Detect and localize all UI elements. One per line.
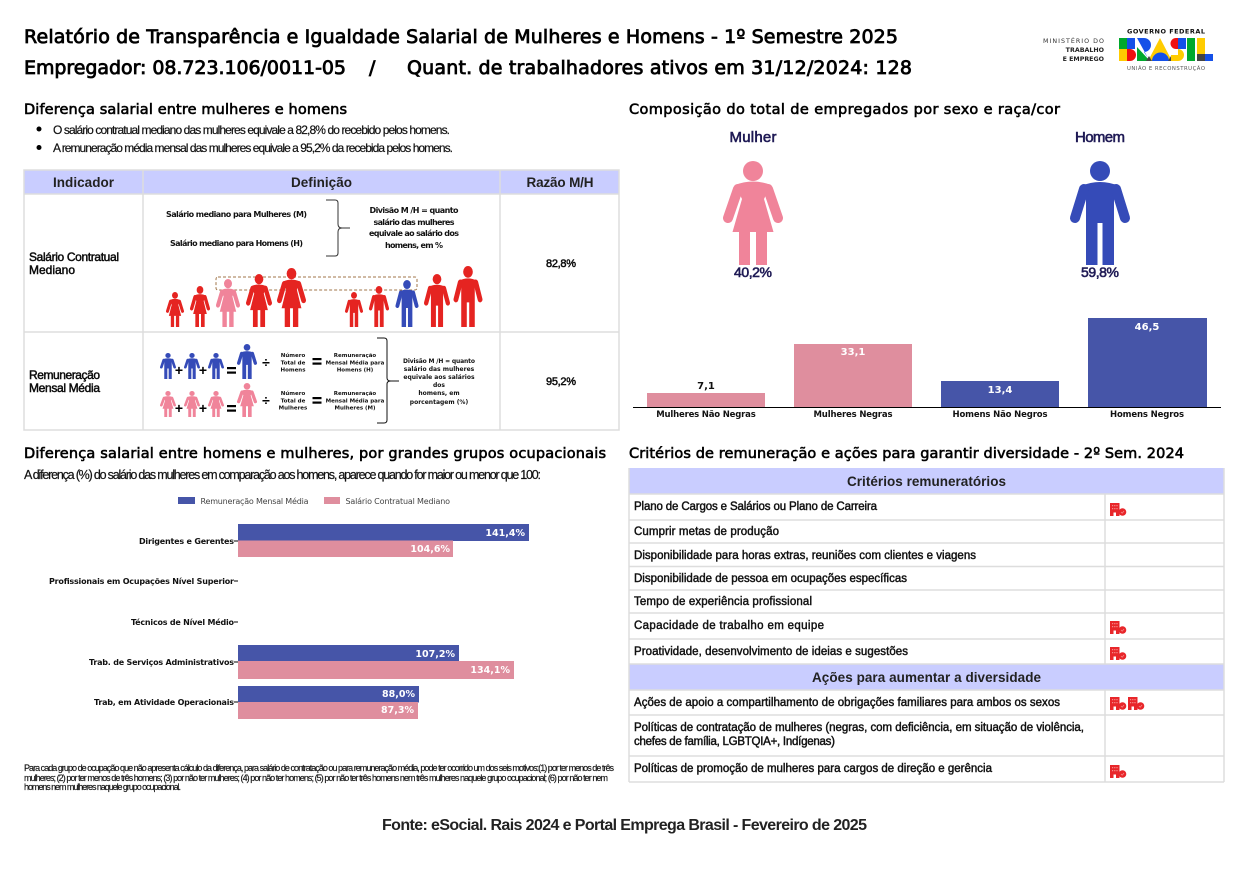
row: remuneração mensal média: Mensal Média (29, 381, 100, 395)
bar: mulheres não negras: 7,1 (697, 381, 715, 392)
subtitle: A diferença (%) do salário das mulheres em comparação aos homens, aparece quando for maior ou menor que 100: (24, 468, 541, 482)
icon: men equation: Homens (280, 368, 306, 374)
logo: ministério: E EMPREGO (1063, 56, 1105, 63)
title (24, 26, 912, 79)
group: serviços administrativos: Trab. de Serviços Administrativos (89, 658, 234, 667)
pictogram: homem: 59,8% (1081, 264, 1119, 280)
criteria list: Capacidade de trabalho em equipe (634, 620, 824, 632)
actions list: Ações de apoio a compartilhamento de obrigações familiares para ambos os sexos (634, 697, 1060, 709)
icon: women equation: Mulheres (279, 406, 308, 412)
row: salário contratual mediano: Salário mediano para Mulheres (M) (166, 210, 307, 219)
icon: men equation: + (175, 362, 183, 378)
row: remuneração mensal média (29, 338, 576, 423)
icon: women equation: Total de (281, 398, 306, 404)
logo: ministério (1043, 36, 1105, 63)
group: atividade operacionais: 87,3% (381, 705, 414, 716)
logo: governo federal brasil: GOVERNO FEDERAL (1127, 28, 1205, 36)
icon: men equation: Número (281, 352, 305, 359)
group: dirigentes e gerentes: 141,4% (485, 528, 525, 539)
bar: mulheres negras: 33,1 (841, 347, 865, 358)
row: remuneração mensal média: homens, em (418, 390, 460, 397)
table header: Definição (291, 175, 352, 190)
row: salário contratual mediano: 82,8% (546, 258, 576, 270)
icons: critérios (1110, 503, 1126, 660)
footnote: mulheres; (2) por ter menos de três homens; (3) por não ter mulheres; (4) por não ter homens; (5) por não ter três homens nem três mulheres naquele grupo ocupacional; (6) por não ter nem (24, 773, 608, 783)
icon: women row (168, 268, 304, 327)
source: Fonte: eSocial. Rais 2024 e Portal Emprega Brasil - Fevereiro de 2025 (382, 817, 867, 834)
actions list: Políticas de contratação de mulheres (negras, com deficiência, em situação de violência, (634, 722, 1084, 734)
footnote: homens nem mulheres naquele grupo ocupacional. (24, 782, 181, 792)
icon: men equation: + (199, 362, 207, 378)
bar: homens não negros: 13,4 (988, 385, 1012, 396)
row: remuneração mensal média: Remuneração (29, 368, 100, 382)
legend: Salário Contratual Mediano (346, 497, 450, 506)
icon: women equation: Número (281, 390, 305, 397)
row: remuneração mensal média: Divisão M /H = quanto (403, 358, 475, 365)
icon: men equation (161, 344, 385, 379)
heading: composição: Composição do total de empregados por sexo e raça/cor (629, 102, 1060, 118)
row: remuneração mensal média: equivale aos salários (403, 374, 475, 381)
pictogram: mulher: 40,2% (734, 264, 772, 280)
table: critérios e ações (629, 468, 1224, 782)
row: remuneração mensal média: 95,2% (546, 376, 576, 388)
group: dirigentes e gerentes: 104,6% (410, 544, 450, 555)
group: serviços administrativos (89, 645, 514, 679)
title: / (369, 57, 376, 79)
group: dirigentes e gerentes (139, 524, 529, 557)
actions list: chefes de família, LGBTQIA+, Indígenas) (634, 736, 835, 748)
criteria list: Tempo de experiência profissional (634, 596, 812, 608)
icon: men equation: ÷ (262, 354, 270, 370)
logo: governo federal brasil: UNIÃO E RECONSTRUÇÃO (1127, 65, 1205, 72)
icon: men equation: Total de (281, 360, 306, 366)
row: remuneração mensal média: dos (433, 382, 445, 389)
bar: homens negros (1088, 318, 1207, 420)
logo: ministério: TRABALHO (1066, 47, 1105, 54)
pictogram: mulher: Mulher (730, 129, 776, 146)
group: atividade operacionais (94, 686, 419, 719)
row: salário contratual mediano: Salário Contratual (29, 250, 119, 264)
row: salário contratual mediano: Mediano (29, 263, 75, 277)
logo: governo federal brasil (1119, 28, 1213, 72)
pictogram: homem (1075, 129, 1125, 280)
header: critérios remuneratórios: Critérios remuneratórios (847, 474, 1006, 489)
icon: women equation: ÷ (262, 392, 270, 408)
bar: homens não negros: Homens Não Negros (952, 410, 1048, 420)
criteria list: Disponibilidade para horas extras, reuniões com clientes e viagens (634, 550, 976, 562)
title: Relatório de Transparência e Igualdade Salarial de Mulheres e Homens - 1º Semestre 2025 (24, 26, 898, 48)
table header: Indicador (53, 175, 115, 190)
bar: mulheres não negras: Mulheres Não Negras (656, 410, 756, 420)
criteria list: Proatividade, desenvolvimento de ideias e sugestões (634, 646, 908, 658)
icon: women equation: Mensal Média para (326, 398, 385, 404)
bar: homens negros: 46,5 (1135, 322, 1159, 333)
icon: women equation (161, 383, 385, 417)
legend (178, 496, 450, 506)
row: salário contratual mediano: homens, em % (385, 241, 443, 250)
actions list: Políticas de promoção de mulheres para cargos de direção e gerência (634, 763, 993, 775)
heading: grupos ocupacionais: Diferença salarial entre homens e mulheres, por grandes grupos ocupacionais (24, 446, 606, 462)
heading: diferença salarial: Diferença salarial entre mulheres e homens (24, 102, 347, 118)
icon: women equation: + (199, 400, 207, 416)
title: Empregador: 08.723.106/0011-05 (24, 57, 346, 79)
row: salário contratual mediano (29, 200, 576, 327)
group: dirigentes e gerentes: Dirigentes e Gerentes (139, 537, 234, 546)
bullet list: O salário contratual mediano das mulheres equivale a 82,8% do recebido pelos homens. (53, 123, 450, 137)
pictogram: mulher (728, 129, 778, 280)
logo: ministério: MINISTÉRIO DO (1043, 36, 1104, 45)
group: profissionais nível superior: Profissionais em Ocupações Nível Superior (49, 577, 234, 586)
pictogram: homem: Homem (1075, 129, 1125, 146)
footnote: Para cada grupo de ocupação que não apresenta cálculo da diferença, para salário de contratação ou para remuneração média, pode ter ocorrido um dos seis motivos:(1) por ter menos de três (24, 763, 614, 773)
icon: women equation: Remuneração (334, 391, 376, 397)
footnote (24, 763, 614, 792)
group: atividade operacionais: Trab, em Atividade Operacionais (94, 698, 234, 707)
criteria list (634, 501, 976, 658)
row: remuneração mensal média: salário das mulheres (404, 366, 475, 373)
icon: men row (346, 266, 480, 327)
icon: women equation: + (175, 400, 183, 416)
bullet list: A remuneração média mensal das mulheres equivale a 95,2% da recebida pelos homens. (53, 141, 453, 155)
table: indicadores (24, 170, 619, 430)
criteria list: Disponibilidade de pessoa em ocupações específicas (634, 573, 907, 585)
row: remuneração mensal média: porcentagem (%) (410, 399, 468, 406)
table header (53, 175, 594, 190)
header: ações: Ações para aumentar a diversidade (812, 670, 1041, 685)
heading: critérios: Critérios de remuneração e ações para garantir diversidade - 2º Sem. 2024 (629, 446, 1184, 462)
table header: Razão M/H (526, 175, 594, 190)
bullet list (36, 123, 453, 155)
icons: ações (1110, 697, 1144, 778)
legend: Remuneração Mensal Média (200, 496, 309, 506)
title: Quant. de trabalhadores ativos em 31/12/2024: 128 (407, 57, 912, 79)
bar: mulheres negras: Mulheres Negras (814, 410, 892, 420)
criteria list: Cumprir metas de produção (634, 526, 779, 538)
group: técnicos nível médio: Técnicos de Nível Médio (131, 617, 234, 627)
icon: men equation: Remuneração (334, 353, 376, 359)
group: atividade operacionais: 88,0% (382, 689, 415, 700)
group: serviços administrativos: 107,2% (415, 649, 455, 660)
row: salário contratual mediano: equivale ao salário dos (369, 229, 459, 238)
row: salário contratual mediano: Divisão M /H = quanto (370, 206, 459, 215)
criteria list: Plano de Cargos e Salários ou Plano de Carreira (634, 501, 878, 513)
icon: men equation: Homens (H) (337, 368, 374, 374)
bar: homens negros: Homens Negros (1110, 410, 1184, 420)
bar chart: composição por sexo e raça (633, 318, 1221, 420)
icon: men equation: Mensal Média para (326, 360, 385, 366)
bar: mulheres não negras (647, 381, 765, 420)
icon: women equation: Mulheres (M) (334, 406, 376, 412)
row: salário contratual mediano: Salário mediano para Homens (H) (170, 239, 303, 248)
actions list (634, 697, 1084, 775)
row: salário contratual mediano: salário das mulheres (374, 218, 455, 227)
group: serviços administrativos: 134,1% (470, 665, 510, 676)
bar: homens não negros (941, 381, 1059, 420)
bar: mulheres negras (794, 344, 912, 420)
bar chart: grupos ocupacionais (49, 524, 529, 719)
